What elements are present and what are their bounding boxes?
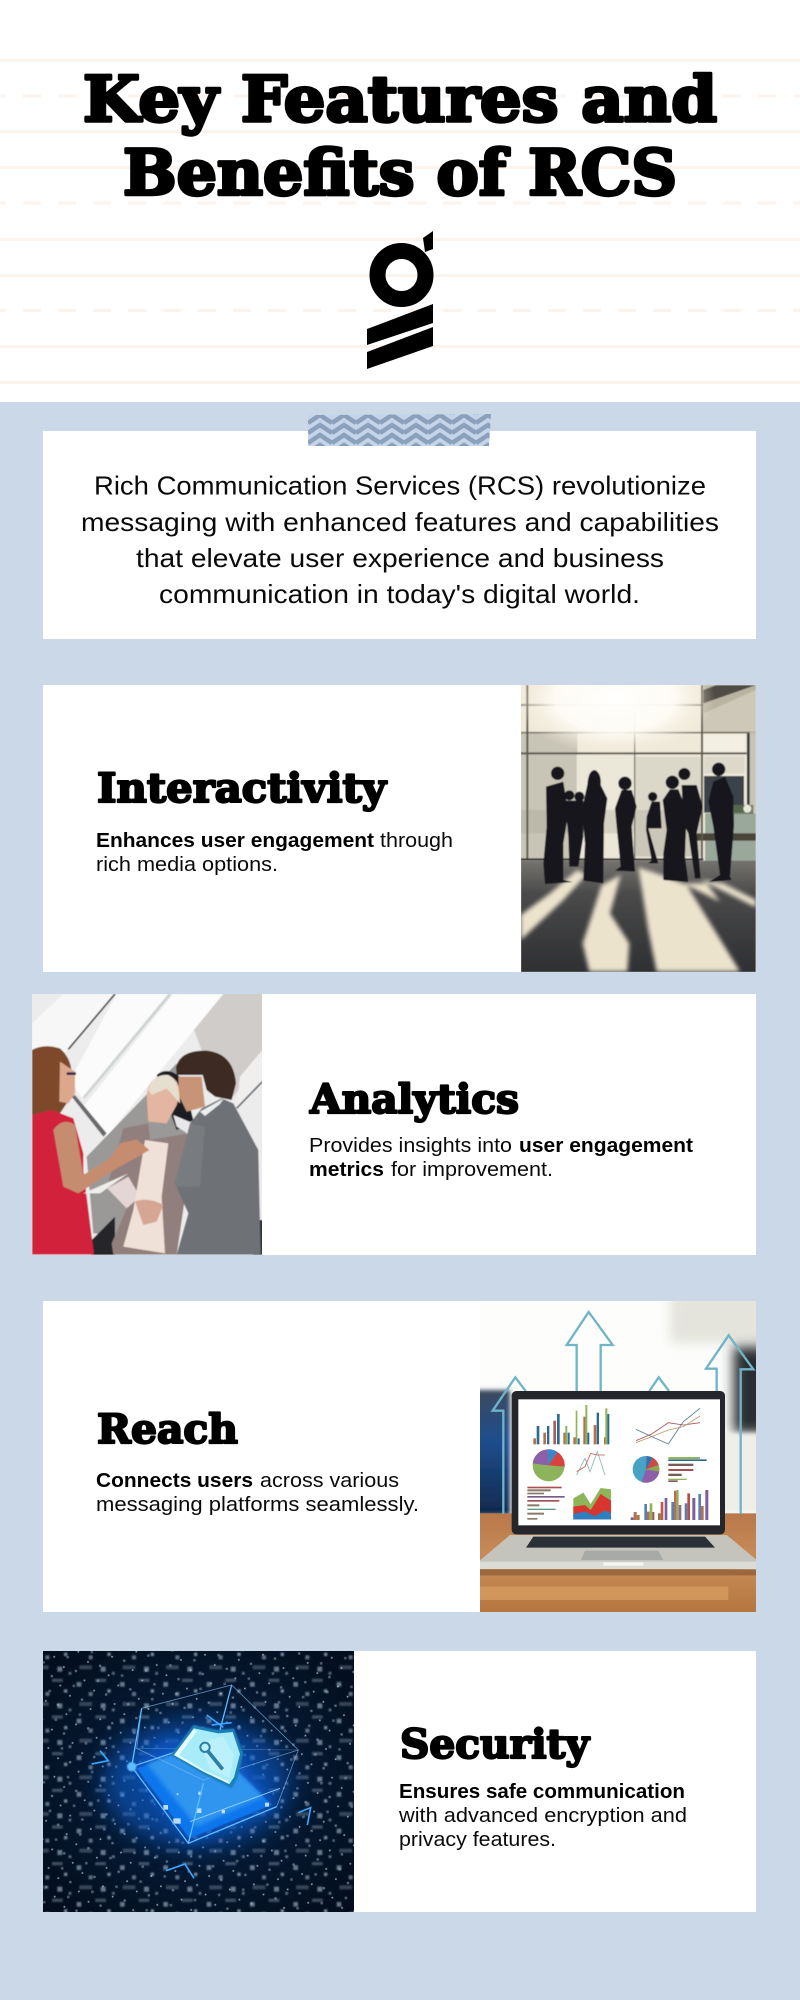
text: interactivity description: Enhances user engagement [96,829,374,852]
text: reach description [96,1469,419,1516]
panel: security [42,1650,756,1913]
image: laptop showing charts on a wooden desk [480,1301,756,1612]
title [83,62,717,210]
text: reach description: across various [260,1469,399,1492]
washi tape [308,414,491,446]
icon: logo mark [367,231,433,369]
text: interactivity description [96,829,453,876]
intro text: that elevate user experience and business [136,543,664,573]
panel: analytics [30,993,756,1256]
text: analytics description [309,1134,693,1181]
text: security description: with advanced encryption and [398,1804,687,1827]
panel: interactivity [43,685,756,972]
text: security description: Ensures safe communication [399,1780,685,1803]
text: interactivity description: through [380,829,453,852]
text: analytics description: user engagement [519,1134,693,1157]
text: security description [398,1780,687,1851]
intro text: messaging with enhanced features and capabilities [81,507,719,537]
text: reach description: Connects users [96,1469,253,1492]
heading: Analytics: Analytics [309,1076,519,1123]
panel: reach [43,1293,770,1613]
heading: Security: Security [400,1721,591,1768]
text: interactivity description: rich media options. [96,853,278,876]
title: Benefits of RCS [123,136,677,210]
image: glowing digital shield [42,1650,357,1913]
intro text [81,470,719,609]
image: silhouettes of business people in a bright lobby [521,685,756,972]
image: colleagues in conversation [30,993,263,1256]
title: Key Features and [83,62,717,136]
intro text: communication in today's digital world. [159,579,640,609]
panel: intro [43,414,756,639]
intro text: Rich Communication Services (RCS) revolutionize [94,470,706,500]
text: analytics description: for improvement. [391,1158,553,1181]
text: analytics description: metrics [309,1158,384,1181]
heading: Interactivity: Interactivity [97,765,388,812]
heading: Reach: Reach [97,1406,238,1453]
text: reach description: messaging platforms seamlessly. [96,1493,419,1516]
panel: header [0,0,800,402]
text: security description: privacy features. [399,1828,556,1851]
text: analytics description: Provides insights into [309,1134,512,1157]
